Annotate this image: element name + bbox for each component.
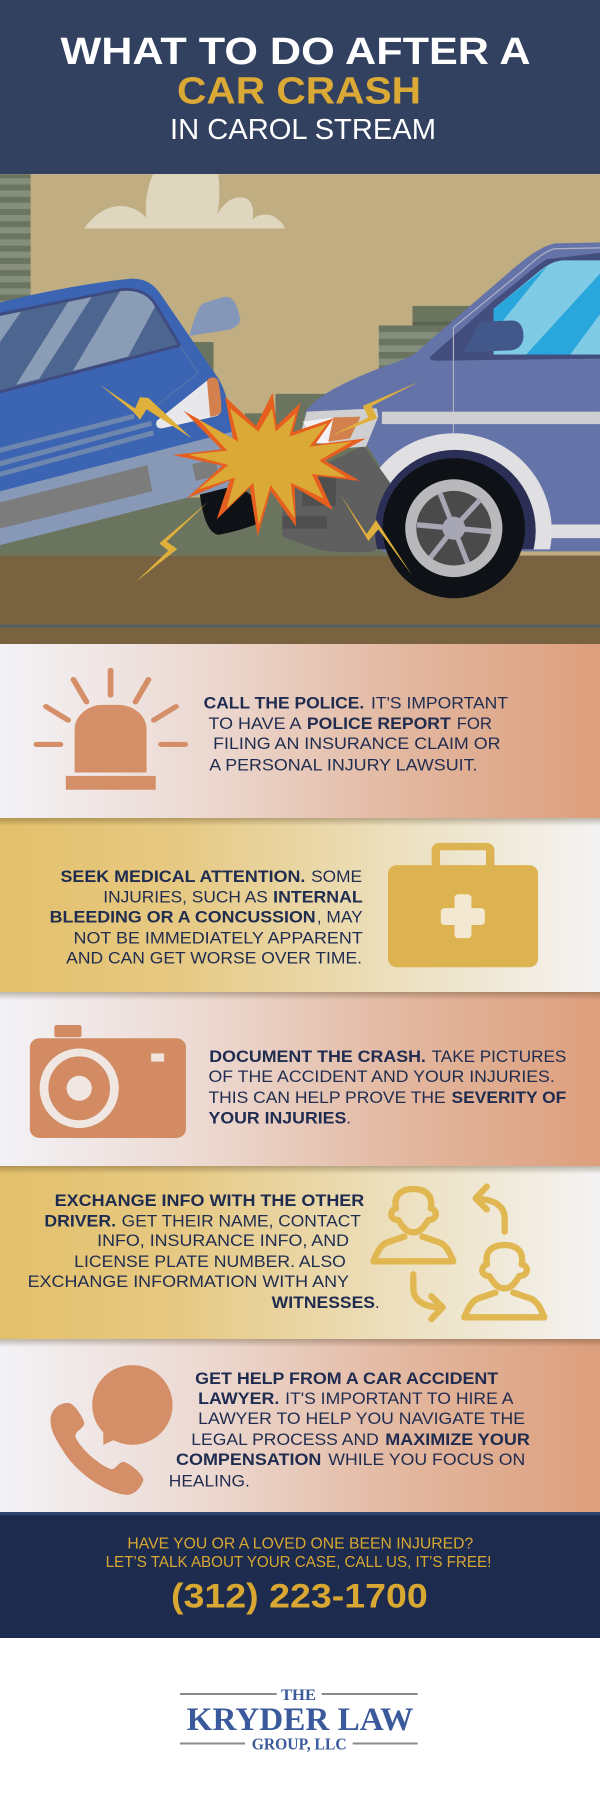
icon: first aid kit [388, 847, 538, 967]
text: call the police: A PERSONAL INJURY LAWSUIT. [209, 756, 478, 774]
text: get help from a lawyer: LEGAL PROCESS AND [191, 1431, 379, 1449]
bolt: blue car hood [100, 385, 192, 438]
text: get help from a lawyer [169, 1370, 530, 1490]
text: get help from a lawyer: GET HELP FROM A CAR ACCIDENT [195, 1370, 498, 1388]
text: get help from a lawyer: LAWYER TO HELP YOU NAVIGATE THE [198, 1410, 525, 1428]
text: document the crash: YOUR INJURIES [208, 1108, 346, 1127]
title [60, 31, 530, 146]
panel: exchange info [0, 1166, 600, 1339]
text: exchange info: INFO, INSURANCE INFO, AND [97, 1232, 349, 1250]
text: document the crash: TAKE PICTURES [432, 1047, 566, 1066]
text: exchange info: . [375, 1294, 380, 1312]
footer logo [0, 1638, 600, 1798]
text: document the crash: THIS CAN HELP PROVE THE [208, 1088, 446, 1107]
call to action text: HAVE YOU OR A LOVED ONE BEEN INJURED? [127, 1536, 474, 1552]
text: seek medical attention: BLEEDING OR A CONCUSSION [50, 907, 316, 926]
text: exchange info: WITNESSES [272, 1294, 375, 1312]
text: document the crash: OF THE ACCIDENT AND YOUR INJURIES. [208, 1067, 555, 1086]
text: seek medical attention: SEEK MEDICAL ATTENTION. [60, 867, 305, 886]
text: get help from a lawyer: WHILE YOU FOCUS ON [328, 1451, 525, 1469]
call to action banner [0, 1512, 600, 1638]
text: get help from a lawyer: MAXIMIZE YOUR [385, 1431, 530, 1449]
text: seek medical attention: SOME [311, 867, 362, 886]
icon: camera [30, 1025, 186, 1138]
text: get help from a lawyer: IT'S IMPORTANT TO HIRE A [285, 1390, 514, 1408]
icon: phone with speech bubble [51, 1365, 173, 1495]
title: WHAT TO DO AFTER A [60, 31, 530, 73]
crash illustration [0, 174, 600, 644]
text: exchange info: GET THEIR NAME, CONTACT [122, 1212, 361, 1230]
buildings [0, 174, 478, 556]
purple car headlight [302, 408, 378, 448]
text: seek medical attention [50, 867, 363, 968]
text: call the police: IT'S IMPORTANT [371, 694, 508, 713]
call to action text: LET’S TALK ABOUT YOUR CASE, CALL US, IT’S FREE! [106, 1554, 491, 1571]
icon: two people exchanging [373, 1187, 544, 1319]
title: IN CAROL STREAM [170, 114, 436, 146]
blue car [0, 279, 256, 545]
text: exchange info [28, 1192, 380, 1312]
text: call the police: TO HAVE A [208, 714, 302, 733]
call to action text [106, 1536, 491, 1571]
wheel [383, 458, 525, 598]
text: exchange info: EXCHANGE INFO WITH THE OTHER [55, 1192, 364, 1210]
text: get help from a lawyer: HEALING. [169, 1472, 250, 1490]
cloud [84, 174, 285, 228]
text: document the crash: SEVERITY OF [452, 1088, 566, 1107]
panel: seek medical attention [0, 818, 600, 992]
text: seek medical attention: AND CAN GET WORSE OVER TIME. [66, 948, 362, 968]
scene base and cars [0, 174, 600, 644]
text: document the crash: . [346, 1108, 351, 1127]
lightning bolts [136, 382, 419, 582]
panel: call the police [0, 644, 600, 818]
text: get help from a lawyer: LAWYER. [198, 1390, 279, 1408]
text: exchange info: DRIVER. [44, 1212, 116, 1230]
text: get help from a lawyer: COMPENSATION [176, 1451, 321, 1469]
text: call the police: POLICE REPORT [307, 714, 451, 733]
title: CAR CRASH [177, 71, 421, 113]
text: document the crash: DOCUMENT THE CRASH. [209, 1047, 426, 1066]
explosion and remaining bolts [136, 382, 419, 582]
text: document the crash [208, 1047, 566, 1127]
explosion [173, 393, 366, 537]
text: call the police [204, 694, 508, 774]
text: exchange info: LICENSE PLATE NUMBER. ALSO [74, 1253, 346, 1271]
footer logo: GROUP, LLC [252, 1734, 347, 1753]
footer logo: THE [281, 1687, 316, 1704]
header banner [0, 0, 600, 174]
panel: document the crash [0, 992, 600, 1166]
text: seek medical attention: INJURIES, SUCH AS [103, 887, 268, 906]
purple car [282, 243, 600, 628]
text: seek medical attention: , MAY [317, 907, 363, 926]
text: call the police: FOR [457, 714, 492, 733]
road [0, 556, 600, 644]
text: exchange info: EXCHANGE INFORMATION WITH ANY [28, 1273, 349, 1291]
text: call the police: CALL THE POLICE. [204, 694, 364, 713]
footer logo: KRYDER LAW [187, 1702, 413, 1738]
text: seek medical attention: INTERNAL [273, 887, 363, 906]
text: call the police: FILING AN INSURANCE CLAIM OR [213, 734, 500, 753]
text: seek medical attention: NOT BE IMMEDIATELY APPARENT [74, 928, 363, 947]
panel: get help from a lawyer [0, 1339, 600, 1512]
phone number: (312) 223-1700 [171, 1578, 428, 1616]
icon: siren [36, 670, 185, 790]
